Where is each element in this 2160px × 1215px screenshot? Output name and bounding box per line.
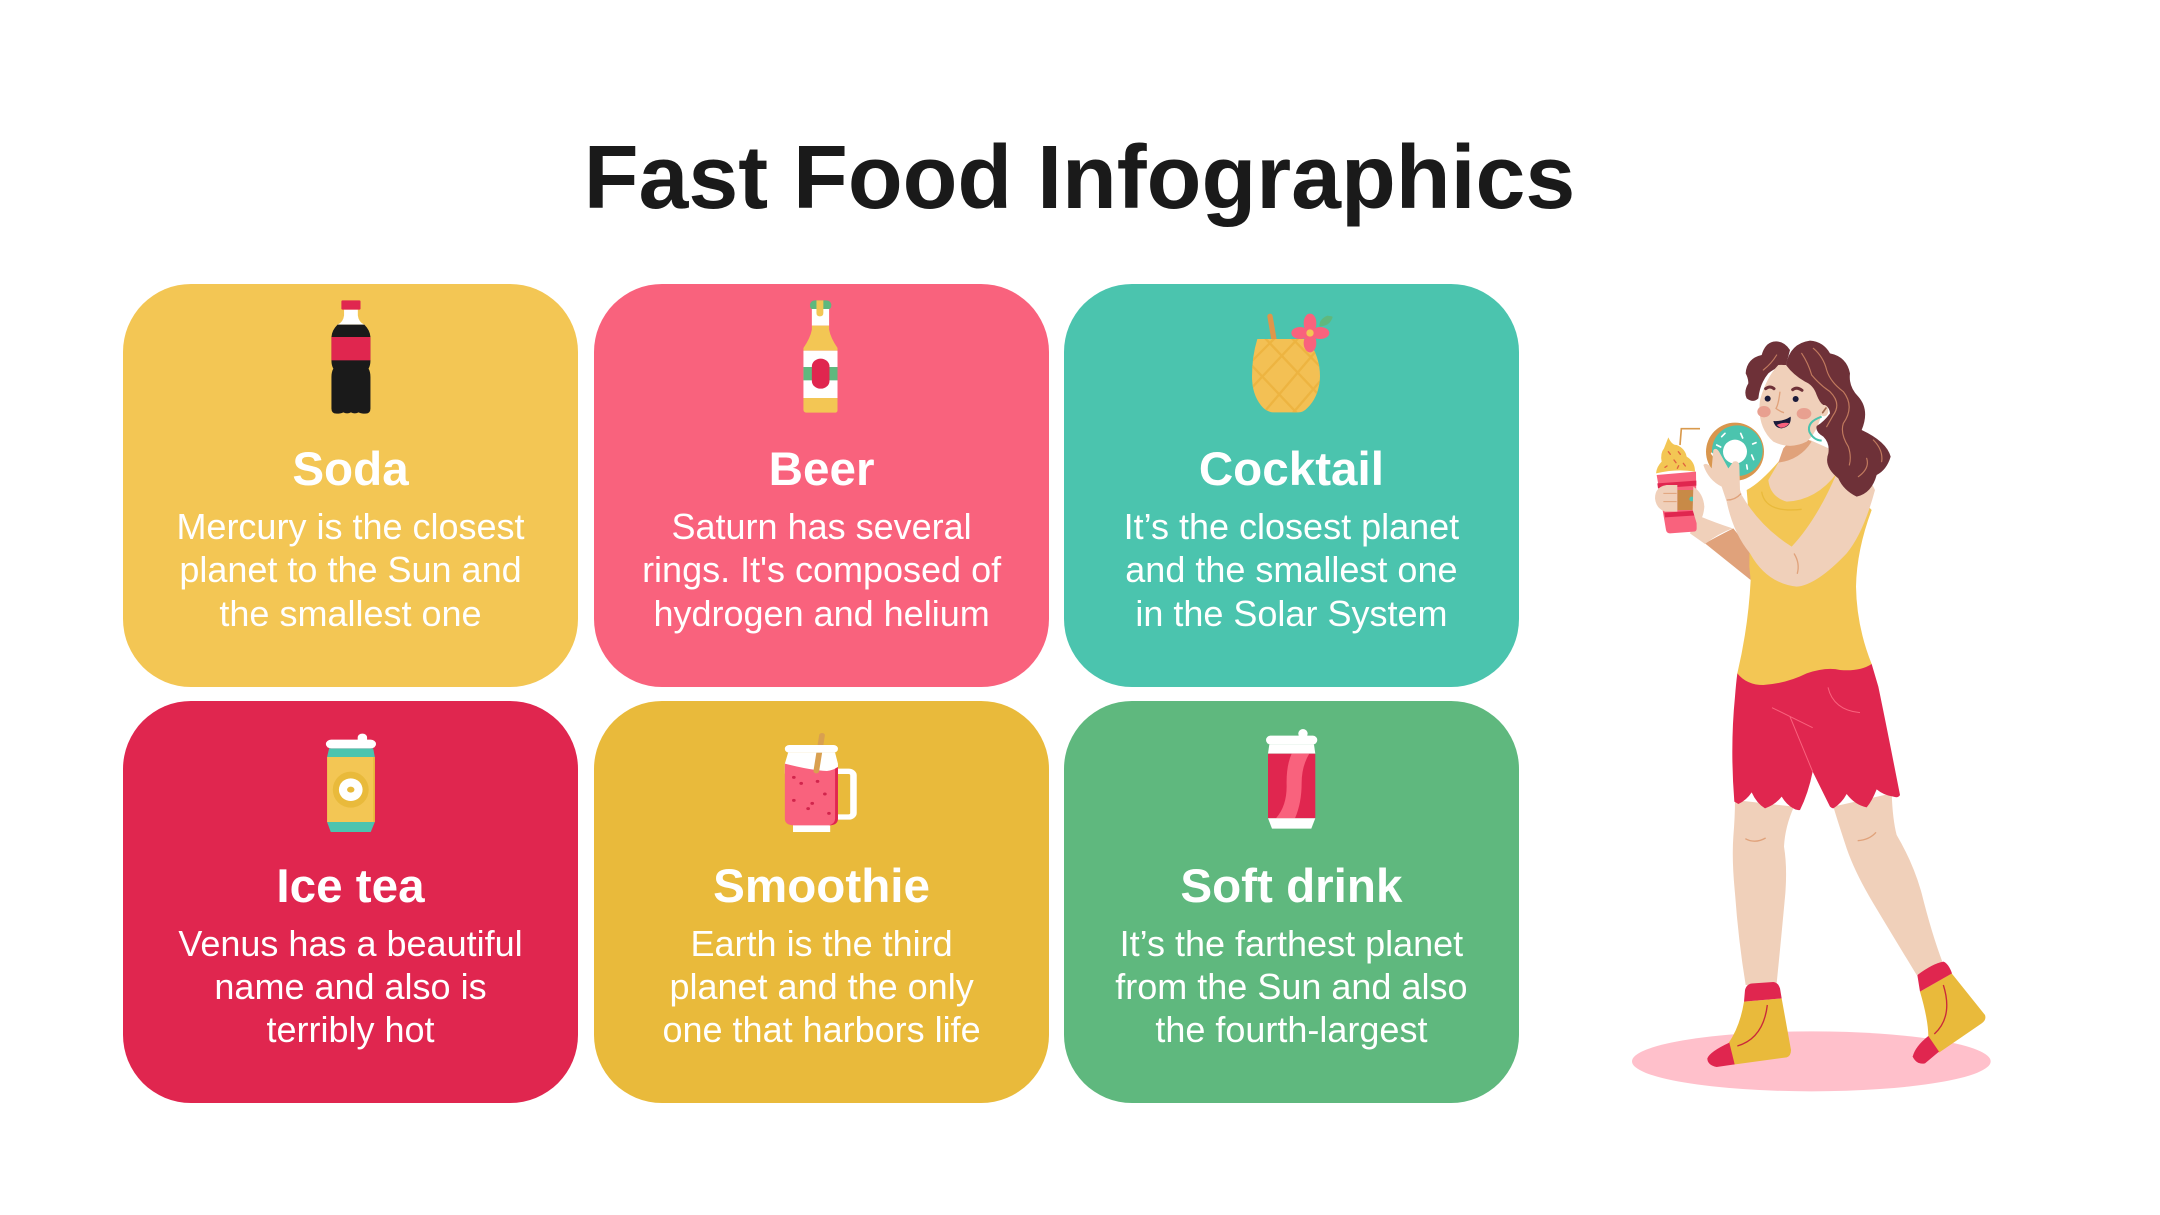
text: soda: the smallest one <box>219 593 482 634</box>
title: Fast Food Infographics <box>584 128 1575 228</box>
icon: soda bottle <box>331 300 370 414</box>
text: soda: planet to the Sun and <box>179 549 522 590</box>
text: soft drink: from the Sun and also <box>1115 966 1468 1007</box>
text: ice tea <box>178 922 523 1050</box>
hair, right side <box>1763 341 1891 497</box>
text: smoothie: planet and the only <box>669 966 974 1007</box>
icon: smoothie jar <box>784 733 857 832</box>
icon: beer bottle <box>803 300 838 413</box>
text: soda: Mercury is the closest <box>176 506 525 547</box>
heading: ice tea: Ice tea <box>276 860 425 912</box>
text: cocktail: in the Solar System <box>1135 593 1447 634</box>
shorts <box>1732 660 1900 810</box>
hair, left side <box>1745 341 1790 401</box>
text: soda <box>176 506 525 634</box>
text: soft drink: the fourth-largest <box>1155 1009 1427 1050</box>
heading: soft drink: Soft drink <box>1180 860 1402 912</box>
back arm <box>1690 515 1751 580</box>
text: smoothie: one that harbors life <box>662 1009 981 1050</box>
ear <box>1820 405 1828 416</box>
neck and chest <box>1762 433 1840 510</box>
text: cocktail: It’s the closest planet <box>1124 506 1459 547</box>
legs and shoes <box>1707 793 1985 1067</box>
panel: cocktail <box>1064 284 1519 687</box>
text: ice tea: Venus has a beautiful <box>178 922 523 964</box>
icon: ice tea can <box>326 734 376 832</box>
top <box>1737 460 1872 685</box>
text: smoothie: Earth is the third <box>691 922 953 964</box>
text: ice tea: name and also is <box>214 966 487 1007</box>
icon: soft drink can <box>1266 729 1318 829</box>
panel: soda <box>123 284 578 687</box>
text: cocktail: and the smallest one <box>1125 549 1458 590</box>
face <box>1757 365 1825 446</box>
drink cup in hand <box>1655 429 1704 533</box>
illustration: woman eating a donut <box>1632 340 1991 1092</box>
text: smoothie <box>662 922 981 1050</box>
text: soft drink: It’s the farthest planet <box>1120 922 1463 964</box>
heading: beer: Beer <box>769 443 874 496</box>
text: soft drink <box>1115 922 1468 1050</box>
panel: smoothie <box>594 700 1049 1103</box>
text: beer <box>642 506 1002 634</box>
heading: cocktail: Cocktail <box>1199 443 1384 496</box>
front arm <box>1727 467 1875 587</box>
heading: smoothie: Smoothie <box>713 860 930 912</box>
panel: ice tea <box>123 700 578 1103</box>
panel: soft drink <box>1064 700 1519 1103</box>
text: cocktail <box>1124 506 1459 634</box>
text: beer: rings. It's composed of <box>642 549 1001 590</box>
panel: beer <box>594 284 1049 687</box>
donut <box>1706 423 1764 481</box>
text: beer: hydrogen and helium <box>653 593 990 634</box>
icon: pineapple cocktail <box>1252 314 1332 412</box>
ground shadow <box>1632 1031 1991 1091</box>
text: beer: Saturn has several <box>672 506 972 547</box>
earring <box>1809 417 1822 441</box>
hand holding donut <box>1703 449 1742 502</box>
text: ice tea: terribly hot <box>266 1009 435 1050</box>
heading: soda: Soda <box>292 443 409 496</box>
